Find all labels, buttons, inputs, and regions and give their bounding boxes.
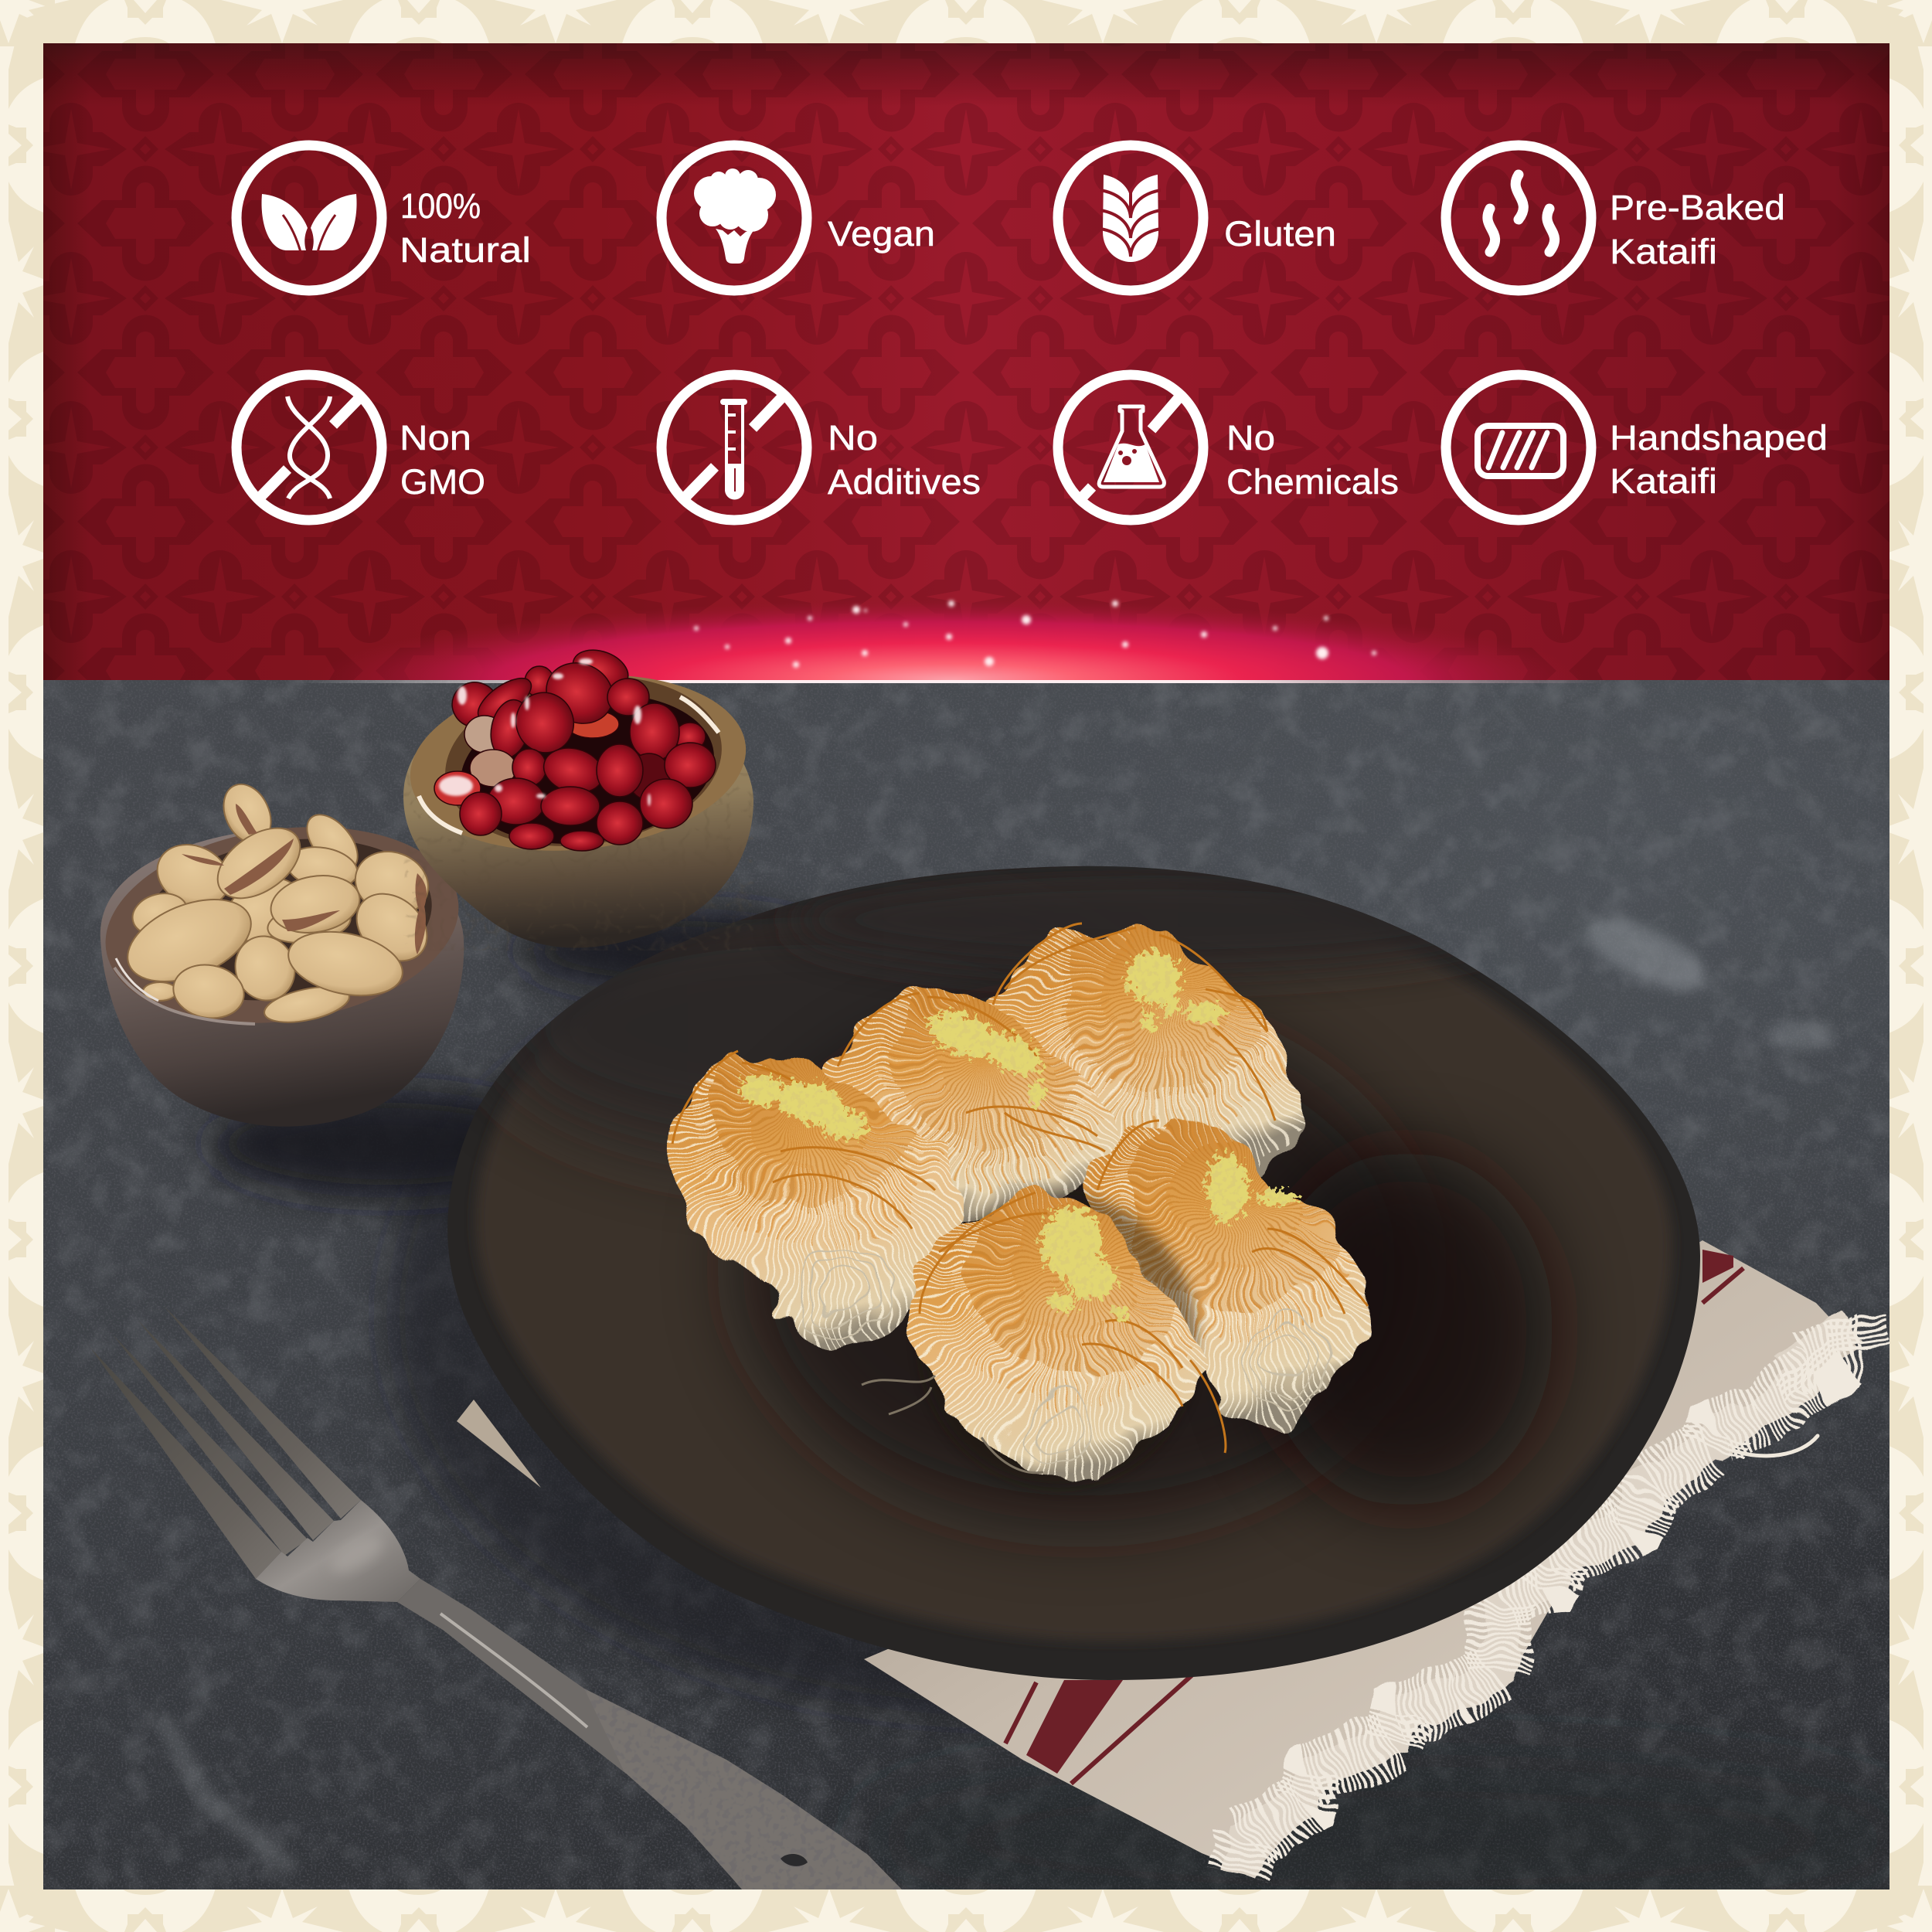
bowl front lip highlight: [114, 968, 255, 1024]
label: Handshaped Kataifi: Handshaped: [1610, 418, 1828, 457]
napkin under plate: [457, 1240, 1859, 1874]
pastry front right: [1063, 1028, 1410, 1415]
syrup glints: [862, 1376, 1043, 1473]
label: Non GMO: GMO: [400, 462, 485, 502]
label: Handshaped Kataifi: [1610, 418, 1828, 501]
label: No Chemicals: No: [1226, 418, 1275, 457]
label: 100% Natural: 100%: [400, 186, 481, 226]
pale glow line at the panel seam: [294, 680, 1607, 683]
icon: gluten wheat: [1058, 145, 1203, 291]
icon: non GMO DNA: [236, 375, 382, 520]
kataifi pastries: [638, 846, 1410, 1488]
icon: vegan broccoli: [662, 145, 807, 291]
label: Pre-Baked Kataifi: [1610, 188, 1785, 271]
label: Vegan: Vegan: [828, 214, 935, 253]
label: Non GMO: [400, 418, 485, 502]
label: No Additives: [828, 418, 981, 502]
pastry back middle: [838, 920, 1124, 1206]
napkin stripes: [1026, 1250, 1733, 1774]
pomegranate seeds: [434, 643, 716, 851]
label: Non GMO: Non: [400, 418, 471, 457]
pastry front: [920, 1194, 1198, 1488]
pistachios: [116, 777, 440, 1029]
fork: [90, 1306, 902, 1889]
icon: no additives test tube: [662, 375, 807, 520]
shadows under plate and bowls: [209, 908, 1607, 1716]
plate: [447, 866, 1700, 1680]
pastry strands: [672, 923, 1368, 1453]
napkin frayed fringe: [1238, 1320, 1859, 1872]
pomegranate bowl: [401, 643, 755, 951]
label: No Chemicals: [1226, 418, 1399, 502]
icon: pre-baked steam: [1446, 145, 1591, 291]
label: 100% Natural: [400, 186, 531, 270]
pastry back right: [1001, 846, 1314, 1157]
pistachio bowl: [93, 777, 471, 1127]
label: No Chemicals: Chemicals: [1226, 462, 1399, 502]
label: No Additives: Additives: [828, 462, 981, 502]
pistachio topping: [740, 951, 1298, 1321]
icon: handshaped tray: [1446, 375, 1591, 520]
panel: photo scene: [43, 643, 1932, 1924]
label: Handshaped Kataifi: Kataifi: [1610, 461, 1717, 501]
label: 100% Natural: Natural: [400, 230, 531, 270]
label: Gluten: Gluten: [1224, 214, 1336, 253]
icon: no chemicals flask: [1058, 375, 1203, 520]
label: Pre-Baked Kataifi: Kataifi: [1610, 232, 1717, 271]
label: Pre-Baked Kataifi: Pre-Baked: [1610, 188, 1785, 227]
label: No Additives: No: [828, 418, 878, 457]
pastry left: [638, 931, 985, 1337]
fork ornate handle: [584, 1689, 902, 1889]
panel: red product attributes: [43, 43, 1889, 680]
icon: 100% natural leaves: [236, 145, 382, 291]
glow at panel bottom: [351, 598, 1546, 680]
slate background: [43, 680, 1932, 1924]
